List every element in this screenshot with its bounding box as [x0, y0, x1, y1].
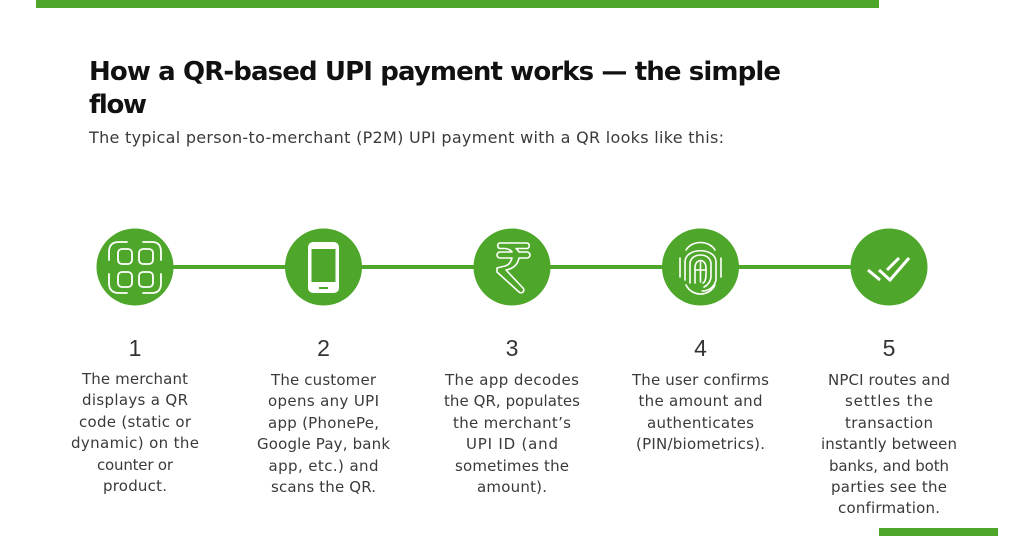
- text: step 1: dynamic) on the: [71, 434, 199, 452]
- number 2: 2: [317, 335, 330, 361]
- number 1: 1: [129, 335, 141, 361]
- text: step 5: transaction: [845, 414, 933, 432]
- text: step 5: instantly between: [821, 435, 957, 453]
- icon: rupee: [474, 228, 550, 306]
- title: flow: [89, 90, 147, 120]
- text: step 1: [71, 370, 199, 495]
- text: step 1: product.: [103, 477, 167, 495]
- text: step 5: [821, 371, 957, 517]
- text: step 1: displays a QR: [82, 391, 188, 409]
- text: step 5: banks, and both: [829, 457, 949, 475]
- text: step 3: the QR, populates: [444, 392, 580, 410]
- bottom green bar: [879, 528, 998, 536]
- icon: phone: [285, 228, 362, 306]
- text: step 1: counter or: [97, 456, 174, 474]
- text: step 5: NPCI routes and: [828, 371, 950, 389]
- step 4: [631, 228, 769, 453]
- number 4: 4: [694, 335, 707, 361]
- text: step 4: (PIN/biometrics).: [636, 435, 765, 453]
- subtitle: The typical person-to-merchant (P2M) UPI payment with a QR looks like this:: [88, 128, 724, 147]
- text: step 3: The app decodes: [444, 371, 579, 389]
- text: step 4: [631, 371, 769, 453]
- top green bar: [36, 0, 879, 8]
- text: step 4: the amount and: [638, 392, 762, 410]
- text: step 2: app (PhonePe,: [268, 414, 379, 432]
- text: step 1: The merchant: [81, 370, 188, 388]
- text: step 2: scans the QR.: [271, 478, 376, 496]
- text: step 5: settles the: [845, 392, 933, 410]
- step 1: [71, 228, 199, 495]
- icon: fingerprint: [662, 228, 739, 306]
- text: step 2: opens any UPI: [268, 392, 379, 410]
- text: step 3: [444, 371, 580, 496]
- icon: QR scan: [96, 228, 174, 306]
- text: step 1: code (static or: [79, 413, 192, 431]
- text: step 3: the merchant’s: [453, 414, 571, 432]
- text: step 2: app, etc.) and: [268, 457, 378, 475]
- text: step 5: confirmation.: [838, 499, 940, 517]
- text: step 3: UPI ID (and: [466, 435, 558, 453]
- step 5: [821, 228, 957, 517]
- number 3: 3: [506, 335, 518, 361]
- text: step 2: The customer: [270, 371, 377, 389]
- text: step 2: Google Pay, bank: [257, 435, 390, 453]
- text: step 2: [257, 371, 390, 496]
- text: step 3: sometimes the: [455, 457, 569, 475]
- step 2: [257, 228, 390, 496]
- text: step 3: amount).: [477, 478, 547, 496]
- icon: double check: [850, 228, 928, 306]
- title: How a QR-based UPI payment works — the simple: [89, 57, 781, 87]
- step 3: [444, 228, 580, 496]
- connector line: [135, 265, 889, 269]
- number 5: 5: [883, 335, 895, 361]
- text: step 4: The user confirms: [631, 371, 769, 389]
- text: step 4: authenticates: [647, 414, 754, 432]
- text: step 5: parties see the: [831, 478, 947, 496]
- title: [89, 57, 781, 120]
